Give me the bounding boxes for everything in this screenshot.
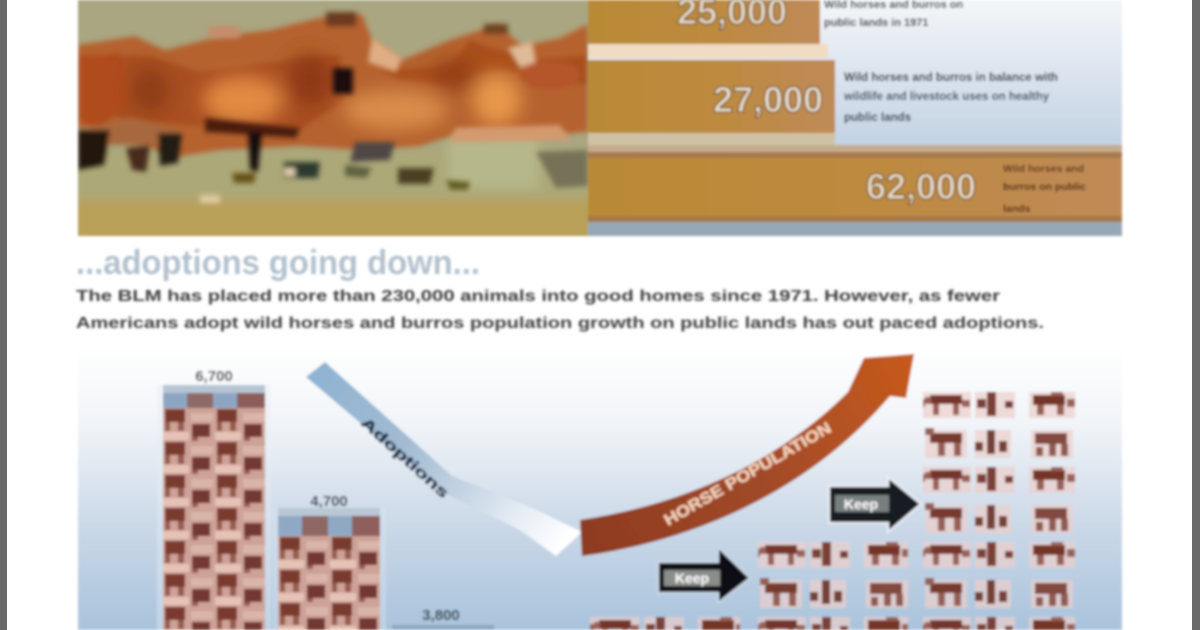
value: 62,000 (866, 166, 976, 207)
body text (76, 288, 1044, 332)
arrow: keep upper (829, 477, 921, 532)
bar: top population (588, 0, 964, 58)
value: 3,800 (422, 607, 460, 624)
body text: The BLM has placed more than 230,000 animals into good homes since 1971. However, as fewer (76, 288, 1000, 305)
description: Wild horses and (1003, 163, 1084, 175)
photo: running wild horses (70, 0, 600, 246)
bar: balance population: wildlife and livestock uses on healthy (843, 91, 1050, 103)
bar: top population: public lands in 1971 (824, 17, 929, 29)
description: Wild horses and burros in balance with (844, 72, 1058, 84)
bar: current population: lands (1003, 203, 1031, 215)
arrow label: Keep (675, 570, 709, 586)
panel: adoptions chart background (78, 345, 1122, 630)
arrow: adoptions trending down (306, 362, 582, 556)
body text: Americans adopt wild horses and burros population growth on public lands has out paced adoptions. (76, 315, 1044, 332)
column: middle adoptions (272, 493, 386, 630)
bar: current population: burros on public (1003, 181, 1086, 193)
dark legs and shadows (78, 130, 110, 170)
icon group: horses held, bottom row (590, 617, 740, 630)
bar: balance population: public lands (844, 112, 911, 124)
icon group: horses held, middle stack (758, 542, 908, 630)
arrow label: HORSE POPULATION (662, 420, 835, 529)
arrow: keep lower (658, 547, 750, 603)
arrow: population growth trending up (580, 354, 914, 556)
arrow label: Adoptions (357, 414, 452, 502)
arrow label: Keep (844, 496, 878, 512)
icon group: horses held, right stack (923, 392, 1075, 630)
column: highest adoptions (157, 368, 271, 630)
column: lowest adoptions (392, 607, 494, 630)
horse herd mass (78, 14, 588, 158)
value: 6,700 (195, 368, 233, 385)
value: 27,000 (713, 79, 823, 120)
bar: balance population (588, 60, 1058, 145)
bar: current population (588, 145, 1122, 236)
heading: ...adoptions going down... (76, 244, 480, 282)
value: 4,700 (310, 493, 348, 510)
panel: population bars background (586, 0, 1124, 146)
